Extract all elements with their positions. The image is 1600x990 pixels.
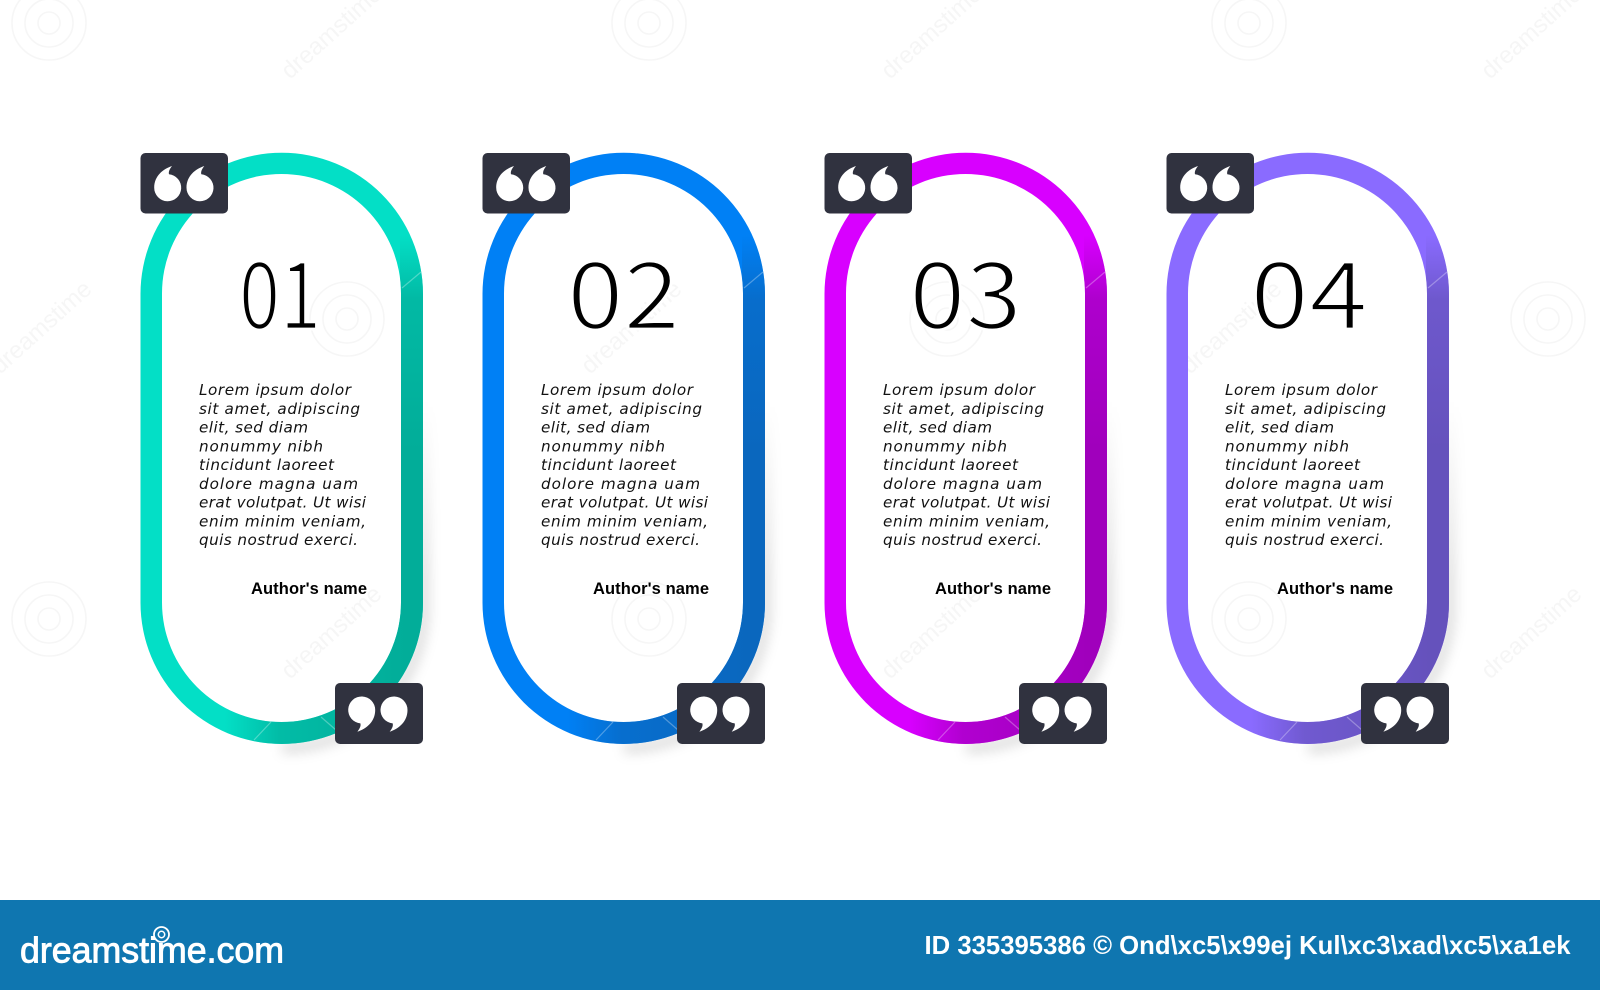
- body text: dolore magna uam: [883, 475, 1042, 493]
- pill ring: [1166, 153, 1449, 744]
- body text: tincidunt laoreet: [883, 456, 1019, 474]
- body text: erat volutpat. Ut wisi: [883, 494, 1051, 512]
- ring shading: [222, 235, 421, 740]
- body text: quis nostrud exerci.: [883, 531, 1042, 549]
- ring shading: [906, 235, 1105, 740]
- body text: enim minim veniam,: [1225, 512, 1392, 530]
- soft shadow: [1308, 400, 1450, 748]
- body text: dolore magna uam: [1225, 475, 1384, 493]
- body text: dolore magna uam: [199, 475, 358, 493]
- body text: tincidunt laoreet: [1225, 456, 1361, 474]
- body text: enim minim veniam,: [883, 512, 1050, 530]
- body text: enim minim veniam,: [541, 512, 708, 530]
- opening quote badge: [1166, 153, 1254, 214]
- closing quote badge: [1361, 683, 1449, 744]
- panel: quote 01: [140, 153, 424, 748]
- number: 04: [1250, 221, 1368, 357]
- body text: quis nostrud exerci.: [1225, 531, 1384, 549]
- closing quote badge: [1019, 683, 1107, 744]
- logo: dreamstime.com: [20, 930, 284, 970]
- panel: quote 03: [824, 153, 1108, 748]
- body text: nonummy nibh: [541, 437, 665, 455]
- number: 03: [909, 221, 1022, 357]
- body text: elit, sed diam: [1225, 418, 1334, 436]
- opening quote badge: [482, 153, 570, 214]
- body text: sit amet, adipiscing: [1225, 400, 1386, 418]
- pill ring: [482, 153, 765, 744]
- author: Author's name: [251, 580, 367, 598]
- pill ring: [824, 153, 1107, 744]
- body text: [199, 381, 367, 549]
- body text: Lorem ipsum dolor: [199, 381, 353, 399]
- closing quote badge: [677, 683, 765, 744]
- body text: nonummy nibh: [883, 437, 1007, 455]
- watermark pattern: dreamstime: [1176, 276, 1287, 379]
- body text: nonummy nibh: [1225, 437, 1349, 455]
- body text: sit amet, adipiscing: [199, 400, 360, 418]
- body text: elit, sed diam: [883, 418, 992, 436]
- number: 01: [239, 221, 321, 357]
- panel: quote 02: [482, 153, 766, 748]
- ring shading: [564, 235, 763, 740]
- watermark pattern: dreamstime: [1476, 581, 1587, 684]
- body text: [541, 381, 709, 549]
- image id credit: ID 335395386 © Ond\xc5\x99ej Kul\xc3\xad\xc5\xa1ek: [924, 930, 1571, 960]
- opening quote badge: [140, 153, 228, 214]
- watermark pattern: dreamstime: [876, 581, 987, 684]
- body text: sit amet, adipiscing: [541, 400, 702, 418]
- watermark pattern: dreamstime: [576, 276, 687, 379]
- body text: elit, sed diam: [541, 418, 650, 436]
- body text: [1225, 381, 1393, 549]
- body text: erat volutpat. Ut wisi: [1225, 494, 1393, 512]
- pill ring: [140, 153, 423, 744]
- body text: quis nostrud exerci.: [541, 531, 700, 549]
- body text: quis nostrud exerci.: [199, 531, 358, 549]
- closing quote badge: [335, 683, 423, 744]
- body text: erat volutpat. Ut wisi: [199, 494, 367, 512]
- panel: quote 04: [1166, 153, 1450, 748]
- body text: tincidunt laoreet: [541, 456, 677, 474]
- body text: erat volutpat. Ut wisi: [541, 494, 709, 512]
- body text: nonummy nibh: [199, 437, 323, 455]
- soft shadow: [624, 400, 766, 748]
- body text: tincidunt laoreet: [199, 456, 335, 474]
- watermark pattern: [0, 0, 1587, 684]
- author: Author's name: [935, 580, 1051, 598]
- body text: [883, 381, 1051, 549]
- body text: Lorem ipsum dolor: [541, 381, 695, 399]
- soft shadow: [966, 400, 1108, 748]
- soft shadow: [282, 400, 424, 748]
- body text: sit amet, adipiscing: [883, 400, 1044, 418]
- opening quote badge: [824, 153, 912, 214]
- body text: Lorem ipsum dolor: [883, 381, 1037, 399]
- body text: dolore magna uam: [541, 475, 700, 493]
- author: Author's name: [593, 580, 709, 598]
- footer banner: [0, 900, 1600, 990]
- number: 02: [567, 221, 680, 357]
- ring shading: [1248, 235, 1447, 740]
- body text: elit, sed diam: [199, 418, 308, 436]
- body text: enim minim veniam,: [199, 512, 366, 530]
- watermark pattern: dreamstime: [276, 581, 387, 684]
- author: Author's name: [1277, 580, 1393, 598]
- body text: Lorem ipsum dolor: [1225, 381, 1379, 399]
